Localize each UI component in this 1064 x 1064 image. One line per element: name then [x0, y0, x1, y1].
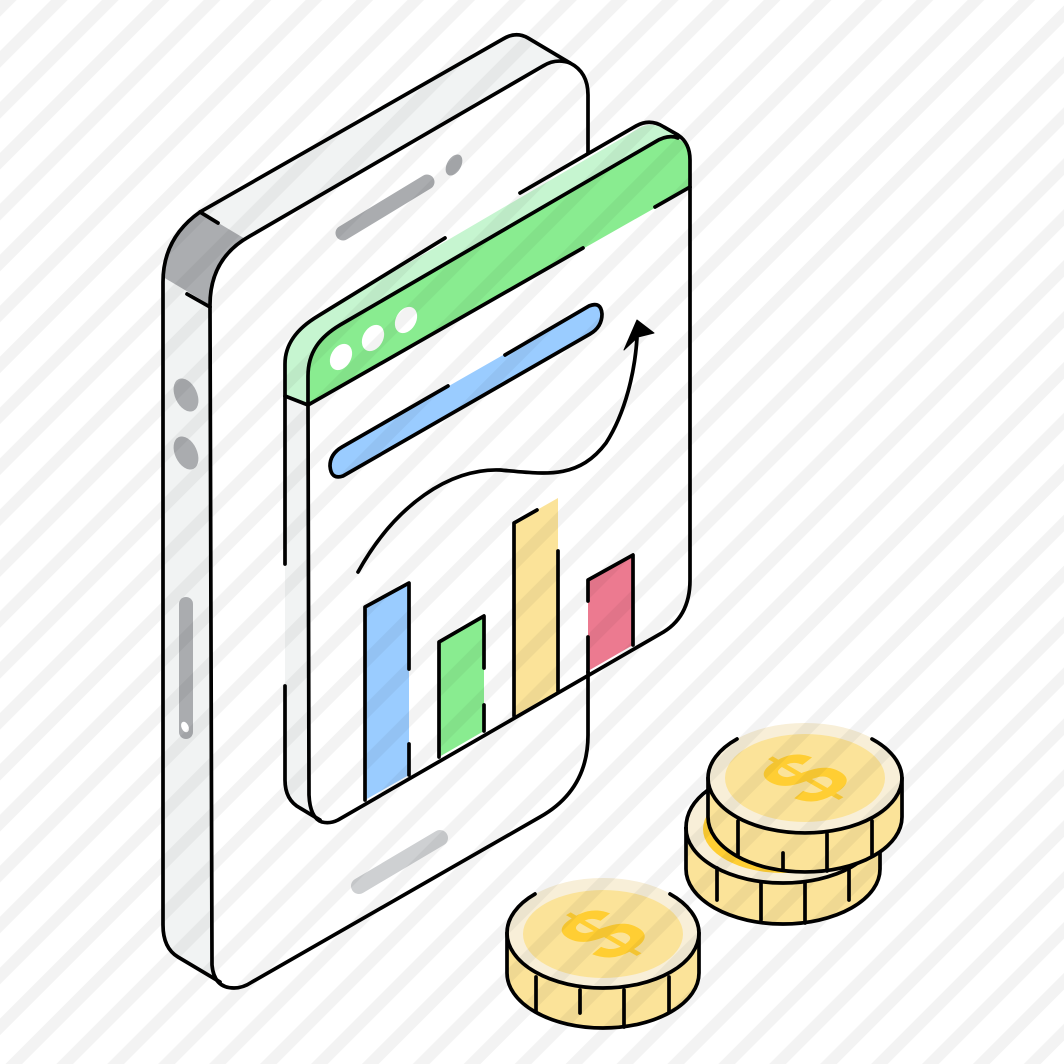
- window controls: [325, 303, 422, 374]
- yellow bar: [514, 498, 558, 716]
- phone home bar: [359, 838, 440, 886]
- phone volume button 2: [169, 432, 203, 474]
- window outline: [285, 122, 690, 823]
- phone left side: [163, 277, 220, 982]
- window side strip: [285, 396, 320, 820]
- green bar: [439, 616, 484, 757]
- panel: coin stack upper: [708, 723, 902, 872]
- red bar: [588, 555, 633, 671]
- phone outline: [163, 35, 588, 988]
- dollar sign: $: [732, 736, 878, 820]
- phone front camera: [442, 152, 466, 178]
- panel: coin stack lower: [686, 773, 880, 924]
- dollar sign: $: [530, 892, 676, 976]
- window green title bar: [308, 137, 690, 405]
- trend arrow: [358, 320, 654, 572]
- phone side slot: [179, 604, 193, 732]
- phone side slot hole: [180, 721, 190, 733]
- phone top face: [200, 34, 572, 240]
- phone grey corner: [163, 212, 247, 305]
- window top light green band: [285, 125, 680, 405]
- bar outlines: [365, 510, 633, 800]
- panel: browser window: [285, 122, 690, 823]
- search bar outline: [330, 305, 602, 477]
- panel: coin bottom left: [507, 878, 699, 1028]
- panel: phone: [163, 34, 588, 988]
- blue bar: [365, 583, 409, 800]
- bar chart: [365, 498, 633, 800]
- phone earpiece speaker: [343, 182, 427, 233]
- blue search bar: [330, 305, 602, 477]
- phone volume button 1: [169, 374, 203, 416]
